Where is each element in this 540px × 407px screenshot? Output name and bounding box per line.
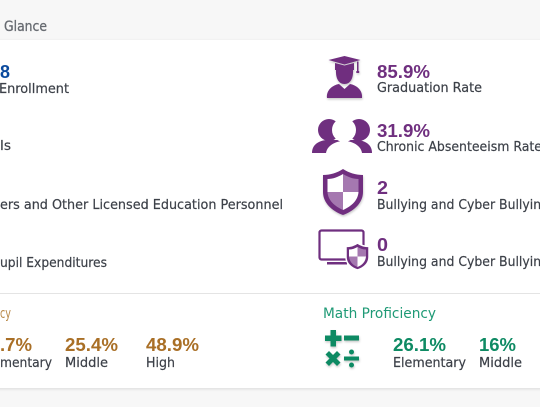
icon: shield bbox=[323, 169, 363, 215]
icon: graduate bbox=[327, 56, 362, 98]
icon: group of people bbox=[312, 118, 372, 153]
divider bbox=[0, 293, 540, 294]
icon: math symbols bbox=[325, 330, 359, 368]
panel: math proficiency bbox=[323, 306, 522, 371]
stat: bullying and cyber bullying incidents: 2 bbox=[377, 177, 388, 198]
stat: bullying and cyber bullying incidents bbox=[377, 177, 540, 213]
stat: graduation rate: Graduation Rate bbox=[377, 81, 482, 96]
stat: chronic absenteeism rate: 31.9% bbox=[377, 120, 430, 141]
panel: reading proficiency: .7% bbox=[0, 334, 32, 355]
stat: teachers and licensed personnel: ers and Other Licensed Education Personnel bbox=[0, 198, 283, 213]
panel: reading proficiency: mentary bbox=[0, 356, 52, 371]
panel: math proficiency: Middle bbox=[479, 356, 522, 371]
stat: enrollment: 8 bbox=[0, 61, 10, 82]
heading: math proficiency: Math Proficiency bbox=[323, 306, 436, 322]
stat: enrollment bbox=[0, 61, 69, 97]
stat: graduation rate bbox=[377, 61, 482, 96]
stat: enrollment: Enrollment bbox=[0, 82, 69, 97]
stat: cyber bullying incidents: 0 bbox=[377, 234, 388, 255]
panel: math proficiency: 16% bbox=[479, 334, 516, 355]
panel: reading proficiency bbox=[0, 306, 199, 371]
icon: monitor with shield bbox=[320, 230, 369, 270]
panel: math proficiency: Elementary bbox=[393, 356, 466, 371]
panel: reading proficiency: Middle bbox=[65, 356, 108, 371]
stat: per pupil expenditures: upil Expenditures bbox=[0, 256, 107, 271]
stat: cyber bullying incidents bbox=[377, 234, 540, 270]
panel: math proficiency: 26.1% bbox=[393, 334, 446, 355]
heading: at a glance: Glance bbox=[4, 19, 47, 35]
panel: reading proficiency: 25.4% bbox=[65, 334, 118, 355]
panel: reading proficiency: High bbox=[146, 356, 175, 371]
panel: reading proficiency: cy bbox=[0, 306, 11, 322]
stat: schools: ls bbox=[0, 139, 11, 154]
stat: graduation rate: 85.9% bbox=[377, 61, 430, 82]
stat: chronic absenteeism rate bbox=[377, 120, 540, 155]
panel: reading proficiency: 48.9% bbox=[146, 334, 199, 355]
